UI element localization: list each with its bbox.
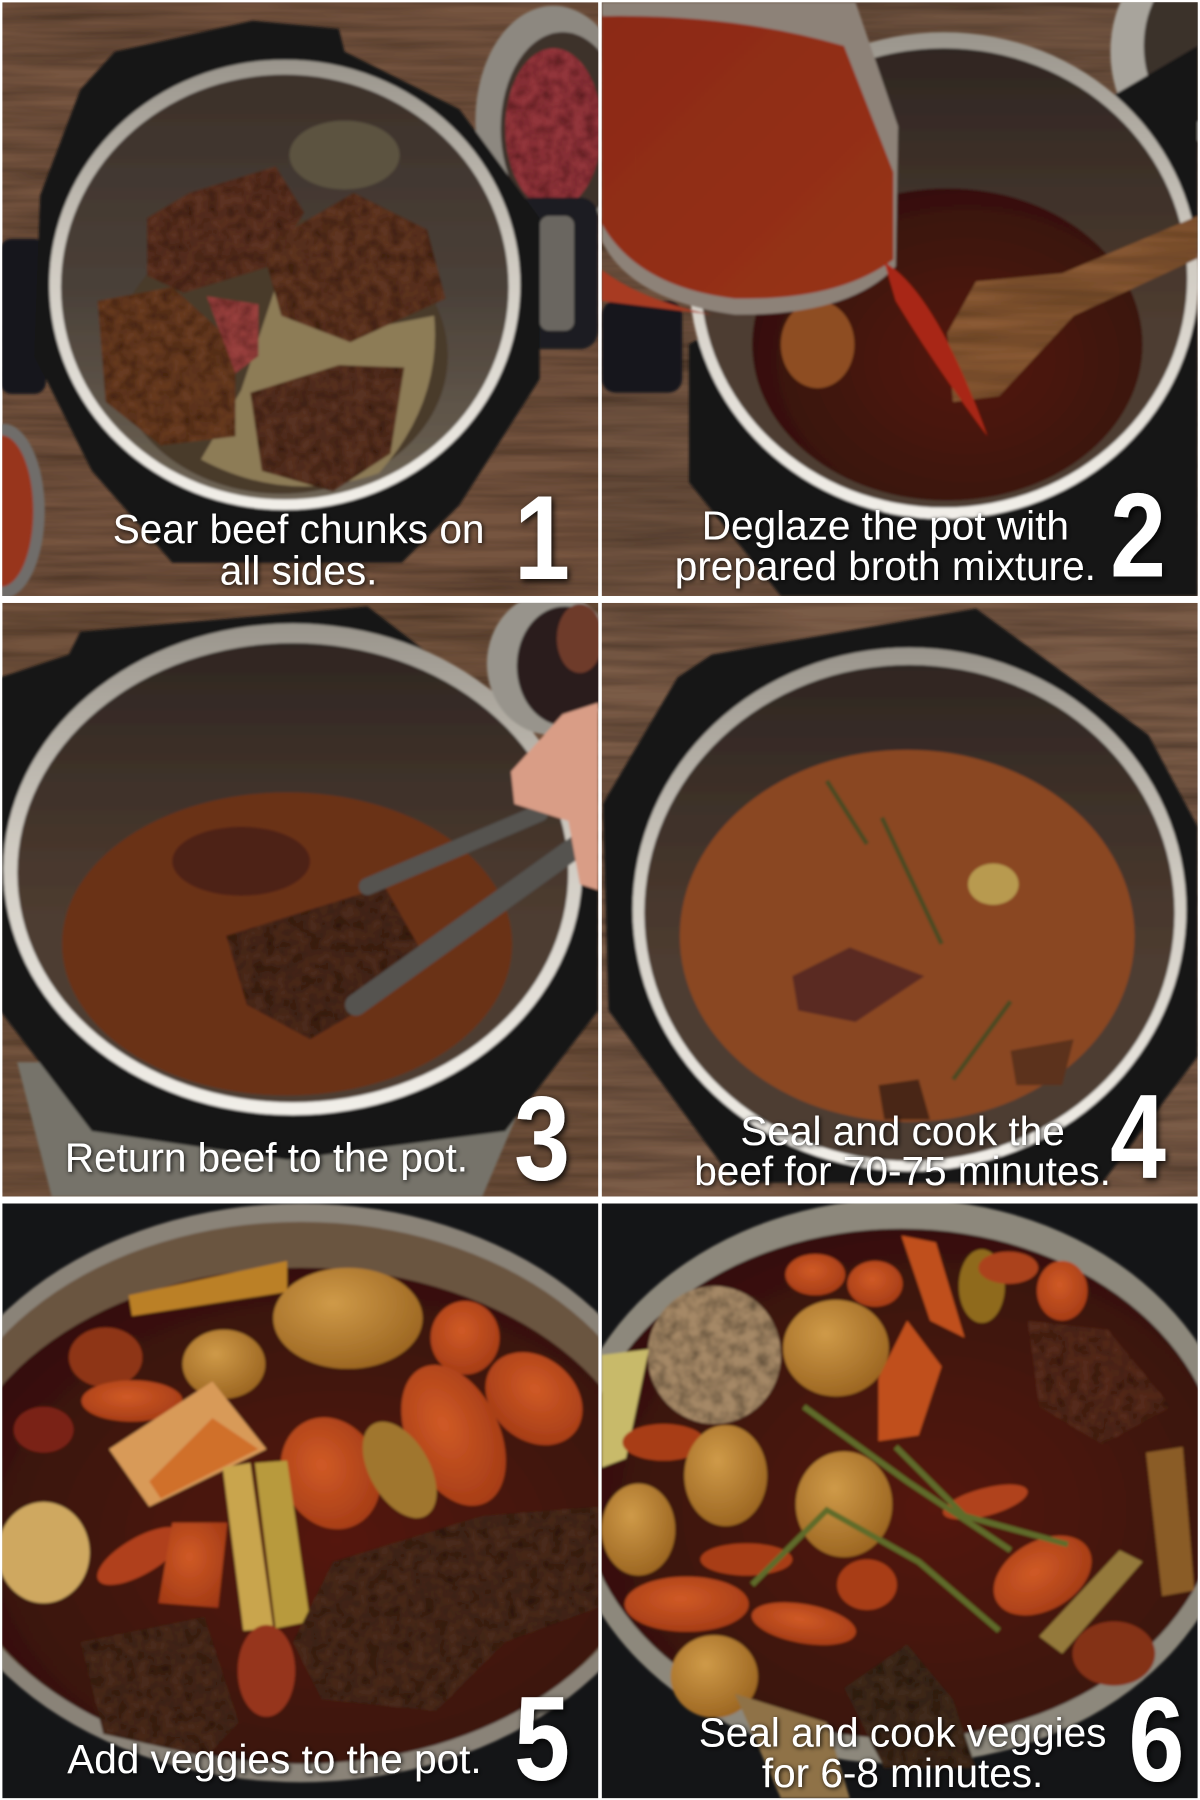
step number 3: 3 — [514, 1072, 570, 1205]
tongs — [356, 813, 580, 1005]
wooden spoon — [947, 216, 1198, 402]
caption 4: beef for 70-75 minutes. — [694, 1148, 1111, 1194]
vegetables — [0, 1261, 601, 1717]
panel 2: deglaze — [602, 0, 1200, 602]
small bowl top right — [1110, 0, 1200, 146]
beef pieces — [844, 1321, 1171, 1768]
caption 5: Add veggies to the pot. — [67, 1736, 482, 1782]
hand — [511, 703, 598, 890]
caption 6: for 6-8 minutes. — [762, 1750, 1043, 1796]
measuring cup of broth — [602, 2, 988, 436]
caption 6: Seal and cook veggies — [699, 1710, 1106, 1756]
icon: pot with broth — [2, 1204, 598, 1784]
caption 1: all sides. — [220, 547, 377, 593]
icon: pressure cooker — [0, 21, 598, 563]
beef, herbs and potato in broth — [792, 781, 1074, 1120]
icon: small sauce bowl — [0, 424, 45, 598]
panel 6: seal and cook veggies — [562, 1199, 1200, 1800]
panel 5: add veggies — [2, 1204, 598, 1798]
icon: pressure cooker — [0, 606, 598, 1197]
icon: pressure cooker — [602, 32, 1199, 596]
beef chunk — [226, 887, 423, 1039]
icon: pot with broth — [562, 1199, 1200, 1764]
caption 3: Return beef to the pot. — [65, 1134, 468, 1180]
side bowl — [486, 602, 598, 736]
icon: side bowl of raw beef — [472, 4, 598, 216]
caption 1: Sear beef chunks on — [113, 506, 484, 552]
vegetables — [602, 1236, 1194, 1798]
caption 4: Seal and cook the — [740, 1108, 1065, 1154]
caption 2: Deglaze the pot with — [702, 503, 1069, 549]
thyme sprig — [752, 1407, 1068, 1631]
beef chunks — [98, 167, 446, 491]
step number 1: 1 — [514, 472, 570, 605]
beef pieces — [80, 1507, 598, 1757]
icon: pressure cooker — [603, 609, 1198, 1183]
panel 4: seal and cook — [602, 603, 1198, 1204]
caption 2: prepared broth mixture. — [675, 543, 1096, 589]
step number 4: 4 — [1110, 1071, 1166, 1204]
step number 2: 2 — [1110, 469, 1166, 602]
panel 3: return beef — [0, 593, 616, 1205]
panel 1: sear beef — [0, 2, 632, 605]
